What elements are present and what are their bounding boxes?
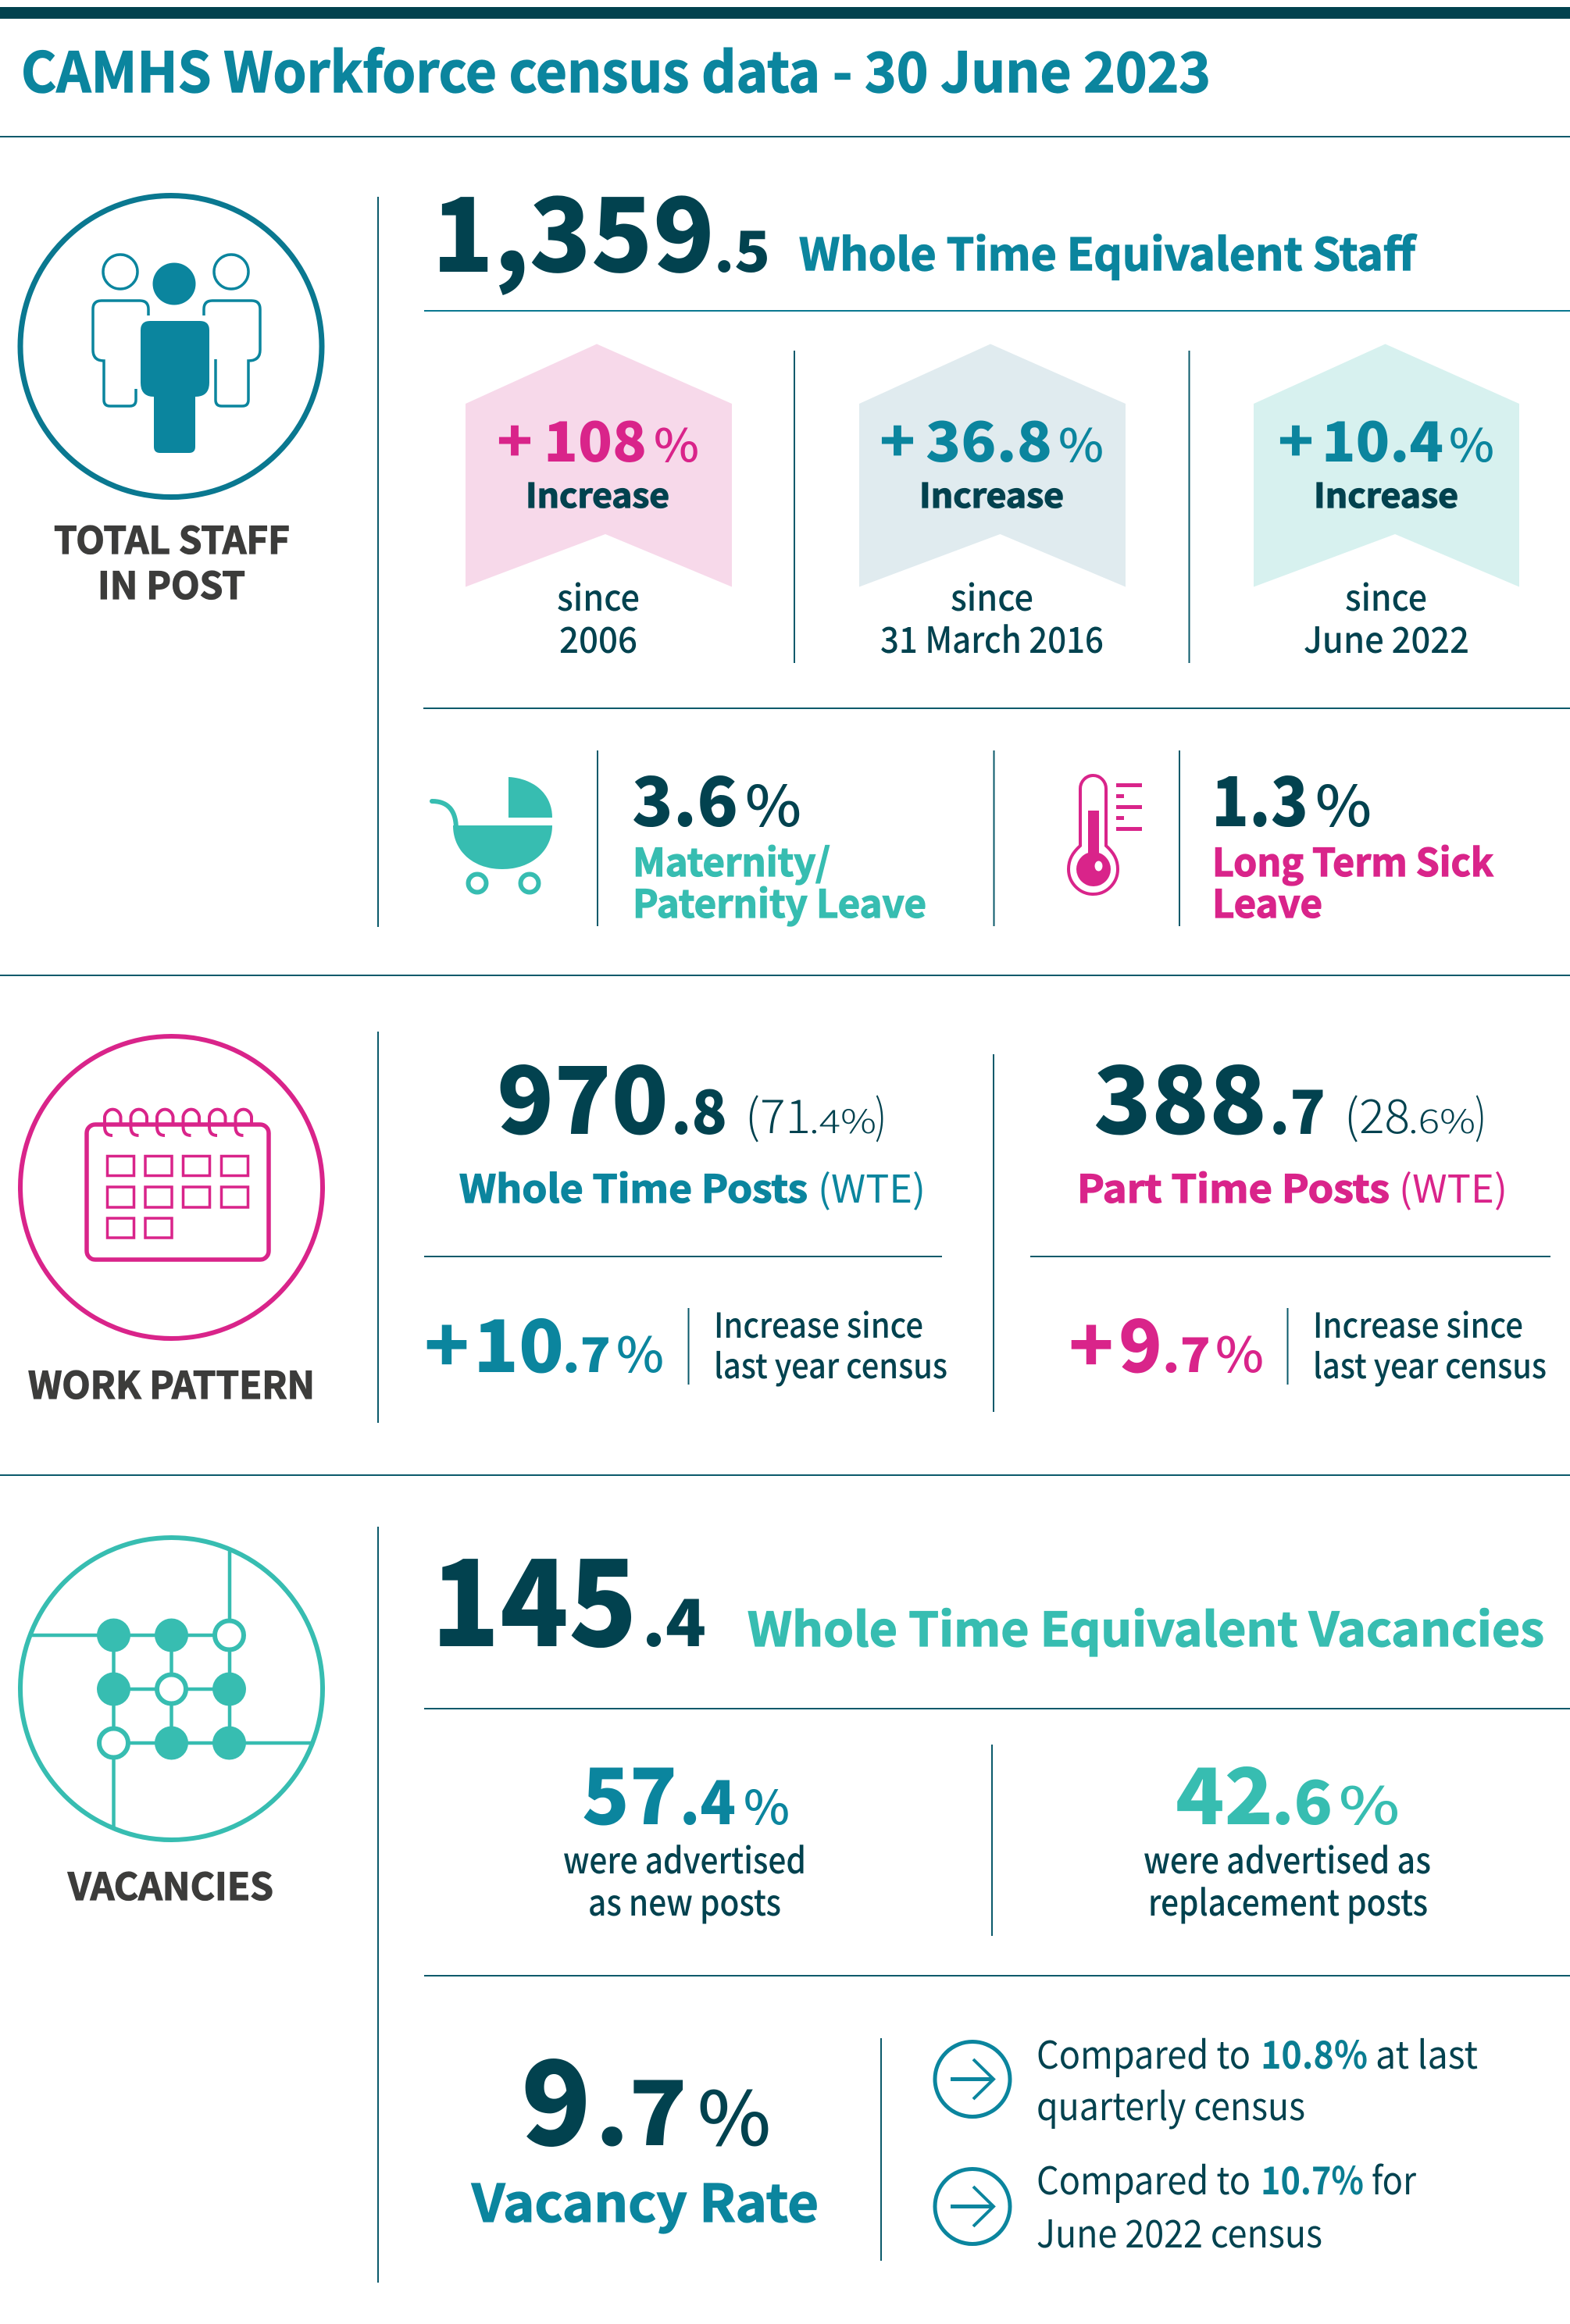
text: increase since last year census: Increase since bbox=[714, 1298, 923, 1348]
stat: maternity / paternity leave: Paternity Leave bbox=[633, 874, 926, 929]
icon: arrow in circle bbox=[935, 2169, 1010, 2244]
text: compared to 10.8% at last quarterly census: quarterly census bbox=[1037, 2076, 1305, 2132]
icon: staff group bbox=[20, 195, 322, 497]
text: increase since last year census: last year census bbox=[1313, 1338, 1547, 1388]
stat: +10.7% increase: % bbox=[616, 1316, 664, 1386]
stat: 42.6% replacement posts bbox=[1144, 1734, 1431, 1927]
stat: long term sick leave: Leave bbox=[1212, 874, 1322, 929]
stat: whole time posts: (WTE) bbox=[818, 1159, 926, 1214]
text: increase since last year census bbox=[1313, 1298, 1547, 1388]
stat: +36.8% since 31 March 2016: 36.8 bbox=[926, 398, 1052, 478]
stat: +9.7% increase: 9 bbox=[1119, 1288, 1162, 1393]
text: increase since last year census: Increase since bbox=[1313, 1298, 1523, 1348]
stat: +10.4% since June 2022: 10.4 bbox=[1322, 398, 1443, 478]
stat: part time posts: 388 bbox=[1094, 1025, 1267, 1161]
headline: 1,359.5 whole time equivalent staff: .5 bbox=[714, 206, 770, 288]
stat: maternity / paternity leave: % bbox=[745, 761, 801, 843]
stat: long term sick leave: 1.3 bbox=[1211, 747, 1308, 847]
stat: whole time posts: (71 bbox=[745, 1079, 811, 1147]
label: total staff in post: IN POST bbox=[98, 555, 245, 610]
label: total staff in post bbox=[54, 510, 290, 610]
stat: +10.4% since June 2022: Increase bbox=[1314, 469, 1458, 518]
panel: vacancies bbox=[20, 1538, 323, 1911]
stat: 57.4% new posts: .4 bbox=[680, 1755, 736, 1842]
top bar bbox=[0, 7, 1570, 19]
headline: 145.4 whole time equivalent vacancies: .4 bbox=[642, 1571, 706, 1665]
headline: 145.4 whole time equivalent vacancies: Whole Time Equivalent Vacancies bbox=[748, 1592, 1544, 1660]
icon: network grid bbox=[20, 1538, 323, 1840]
stat: maternity / paternity leave: 3.6 bbox=[632, 747, 738, 847]
icon: thermometer bbox=[1069, 775, 1142, 894]
stat: whole time posts: 970 bbox=[497, 1025, 669, 1161]
headline: 1,359.5 whole time equivalent staff: 1,359 bbox=[432, 153, 715, 302]
text: increase since last year census: last year census bbox=[714, 1338, 947, 1388]
label: vacancies: VACANCIES bbox=[67, 1856, 273, 1911]
stat: +10.7% increase: 10 bbox=[473, 1288, 564, 1393]
stat: 42.6% replacement posts: % bbox=[1339, 1765, 1400, 1840]
stat: 57.4% new posts: were advertised bbox=[563, 1833, 806, 1884]
stat: +9.7% increase bbox=[1069, 1288, 1264, 1393]
stat: +10.4% since June 2022: June 2022 bbox=[1304, 612, 1469, 664]
text: compared to 10.8% at last quarterly census bbox=[1037, 2025, 1478, 2132]
stat: +9.7% increase: % bbox=[1215, 1316, 1264, 1386]
stat: +108% since 2006: + bbox=[497, 398, 533, 478]
stat: +10.7% increase: + bbox=[424, 1288, 469, 1393]
panel: work pattern bbox=[20, 1036, 323, 1410]
text: compared to 10.7% for June 2022 census: June 2022 census bbox=[1037, 2204, 1322, 2259]
stat: 42.6% replacement posts: replacement posts bbox=[1148, 1875, 1428, 1927]
text: compared to 10.7% for June 2022 census: for bbox=[1372, 2151, 1417, 2206]
stat: part time posts: (28 bbox=[1344, 1079, 1410, 1147]
stat: +108% since 2006: Increase bbox=[526, 469, 669, 518]
headline: 1,359.5 whole time equivalent staff bbox=[432, 153, 1417, 302]
headline: 145.4 whole time equivalent vacancies bbox=[431, 1507, 1544, 1681]
stat: part time posts: .6% bbox=[1408, 1096, 1475, 1143]
stat: whole time posts: .8 bbox=[671, 1064, 727, 1152]
stat: long term sick leave: Long Term Sick bbox=[1212, 832, 1493, 888]
icon: arrow in circle bbox=[935, 2041, 1010, 2116]
stat: part time posts: .7 bbox=[1269, 1064, 1326, 1152]
stat: 57.4% new posts: as new posts bbox=[588, 1875, 781, 1927]
stat: 57.4% new posts: 57 bbox=[582, 1734, 677, 1847]
panel: total staff in post bbox=[20, 195, 322, 610]
stat: +36.8% since 31 March 2016: 31 March 2016 bbox=[880, 612, 1104, 664]
stat: whole time posts bbox=[459, 1025, 926, 1214]
stat: 9.7% vacancy rate bbox=[471, 2010, 819, 2237]
stat: 42.6% replacement posts: .6 bbox=[1272, 1755, 1333, 1842]
stat: 9.7% vacancy rate: Vacancy Rate bbox=[471, 2162, 819, 2237]
stat: part time posts: ) bbox=[1475, 1079, 1486, 1147]
stat: maternity / paternity leave bbox=[632, 747, 926, 929]
stat: 57.4% new posts: % bbox=[744, 1770, 790, 1838]
stat: +108% since 2006: % bbox=[654, 409, 699, 475]
stat: whole time posts: Whole Time Posts bbox=[459, 1159, 808, 1214]
text: compared to 10.7% for June 2022 census: Compared to bbox=[1037, 2151, 1251, 2206]
stat: whole time posts: .4% bbox=[809, 1096, 876, 1143]
stat: +36.8% since 31 March 2016: since bbox=[951, 570, 1033, 622]
text: compared to 10.8% at last quarterly census: 10.8% bbox=[1261, 2025, 1368, 2080]
stat: part time posts: (WTE) bbox=[1399, 1159, 1508, 1214]
stat: +108% since 2006: 2006 bbox=[559, 612, 637, 664]
stat: +9.7% increase: + bbox=[1069, 1288, 1114, 1393]
label: total staff in post: TOTAL STAFF bbox=[54, 510, 290, 565]
icon: pram bbox=[432, 777, 552, 892]
headline: 145.4 whole time equivalent vacancies: 145 bbox=[431, 1507, 637, 1681]
stat: long term sick leave bbox=[1211, 747, 1493, 929]
headline: 1,359.5 whole time equivalent staff: Whole Time Equivalent Staff bbox=[799, 219, 1417, 283]
stat: whole time posts: ) bbox=[875, 1079, 887, 1147]
stat: 42.6% replacement posts: were advertised as bbox=[1144, 1833, 1431, 1884]
icon: calendar bbox=[20, 1036, 323, 1338]
stat: +9.7% increase: .7 bbox=[1162, 1317, 1211, 1386]
stat: 9.7% vacancy rate: % bbox=[698, 2060, 771, 2167]
stat: +10.4% since June 2022 bbox=[1254, 344, 1519, 664]
stat: 42.6% replacement posts: 42 bbox=[1176, 1734, 1273, 1847]
text: compared to 10.7% for June 2022 census bbox=[1037, 2151, 1417, 2259]
stat: +36.8% since 31 March 2016 bbox=[859, 344, 1126, 664]
title: CAMHS Workforce census data - 30 June 2023 bbox=[21, 29, 1211, 109]
stat: +108% since 2006: since bbox=[557, 570, 640, 622]
stat: part time posts: Part Time Posts bbox=[1077, 1159, 1390, 1214]
text: compared to 10.7% for June 2022 census: 10.7% bbox=[1261, 2151, 1364, 2206]
stat: +36.8% since 31 March 2016: Increase bbox=[919, 469, 1064, 518]
stat: +10.4% since June 2022: since bbox=[1345, 570, 1427, 622]
stat: 9.7% vacancy rate: 9 bbox=[521, 2010, 591, 2180]
stat: +108% since 2006: 108 bbox=[544, 398, 647, 478]
stat: 9.7% vacancy rate: .7 bbox=[595, 2042, 687, 2172]
stat: +10.4% since June 2022: % bbox=[1449, 409, 1494, 475]
text: compared to 10.8% at last quarterly census: at last bbox=[1376, 2025, 1478, 2080]
text: compared to 10.8% at last quarterly census: Compared to bbox=[1037, 2025, 1251, 2080]
stat: +10.7% increase: .7 bbox=[562, 1317, 611, 1386]
stat: +10.4% since June 2022: + bbox=[1278, 398, 1314, 478]
stat: maternity / paternity leave: Maternity/ bbox=[633, 832, 830, 888]
stat: +36.8% since 31 March 2016: % bbox=[1058, 409, 1104, 475]
text: increase since last year census bbox=[714, 1298, 947, 1388]
stat: +10.7% increase bbox=[424, 1288, 664, 1393]
stat: 57.4% new posts bbox=[563, 1734, 806, 1927]
stat: long term sick leave: % bbox=[1315, 761, 1372, 843]
stat: part time posts bbox=[1077, 1025, 1508, 1214]
stat: +108% since 2006 bbox=[466, 344, 732, 664]
label: work pattern: WORK PATTERN bbox=[28, 1355, 315, 1410]
stat: +36.8% since 31 March 2016: + bbox=[880, 398, 915, 478]
